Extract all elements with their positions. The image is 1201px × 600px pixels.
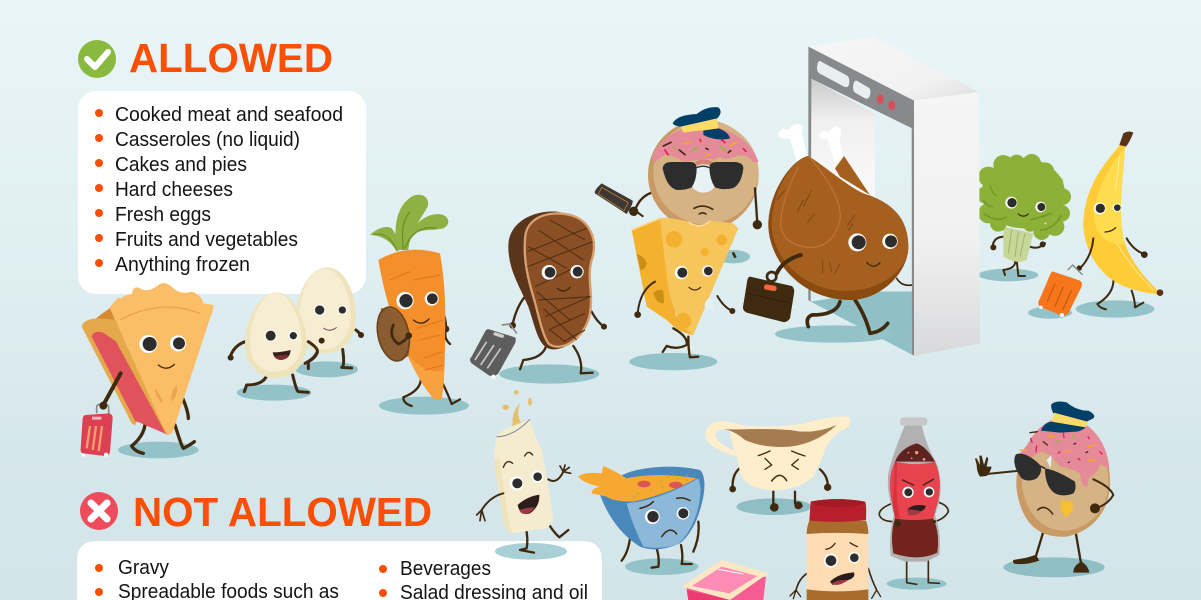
icon: red cross xyxy=(80,492,118,530)
walk-through scanner back xyxy=(808,47,913,355)
allowed items: Cooked meat and seafood xyxy=(115,104,343,126)
character: cheese xyxy=(629,218,738,370)
walk-through scanner front xyxy=(808,37,980,356)
allowed items: Cakes and pies xyxy=(115,154,247,176)
character: cop donut with radio xyxy=(595,107,762,263)
character: broccoli xyxy=(977,154,1071,281)
heading: not allowed xyxy=(80,489,432,535)
icon: green check xyxy=(78,40,116,78)
character: banana with orange suitcase xyxy=(1028,131,1163,319)
panel: not allowed list xyxy=(77,541,602,600)
not allowed items: Beverages xyxy=(400,558,491,580)
allowed items: Fruits and vegetables xyxy=(115,229,298,251)
not allowed items: Gravy xyxy=(118,557,169,579)
not allowed items xyxy=(118,557,588,600)
character: gravy boat xyxy=(705,416,850,515)
allowed items: Casseroles (no liquid) xyxy=(115,129,300,151)
allowed items xyxy=(115,104,343,276)
bullets allowed xyxy=(95,109,103,267)
character: angry cola bottle xyxy=(879,417,948,590)
character: peanut butter jar xyxy=(790,499,881,600)
character: milk bottle xyxy=(477,390,571,560)
character: pink yogurt cup xyxy=(682,560,768,600)
allowed items: Fresh eggs xyxy=(115,204,211,226)
scanner grey band xyxy=(808,47,914,129)
character: steak with grey suitcase xyxy=(470,211,607,384)
carrot leaves xyxy=(370,195,448,263)
allowed items: Hard cheeses xyxy=(115,179,233,201)
not allowed title: NOT ALLOWED xyxy=(133,489,432,535)
allowed items: Anything frozen xyxy=(115,254,250,276)
character: cop donut stopping xyxy=(975,401,1113,577)
character: two eggs xyxy=(228,267,364,401)
scanner top xyxy=(808,37,978,101)
allowed title: ALLOWED xyxy=(129,35,333,81)
character: carrot with backpack xyxy=(370,195,469,415)
character: spilling bowl xyxy=(578,466,704,575)
scanner pillar xyxy=(914,92,980,356)
character: pie with suitcase xyxy=(81,283,213,458)
character: turkey with briefcase xyxy=(743,124,912,343)
bullets not allowed xyxy=(95,564,387,597)
panel: allowed list xyxy=(78,91,366,294)
heading: allowed xyxy=(78,35,333,81)
